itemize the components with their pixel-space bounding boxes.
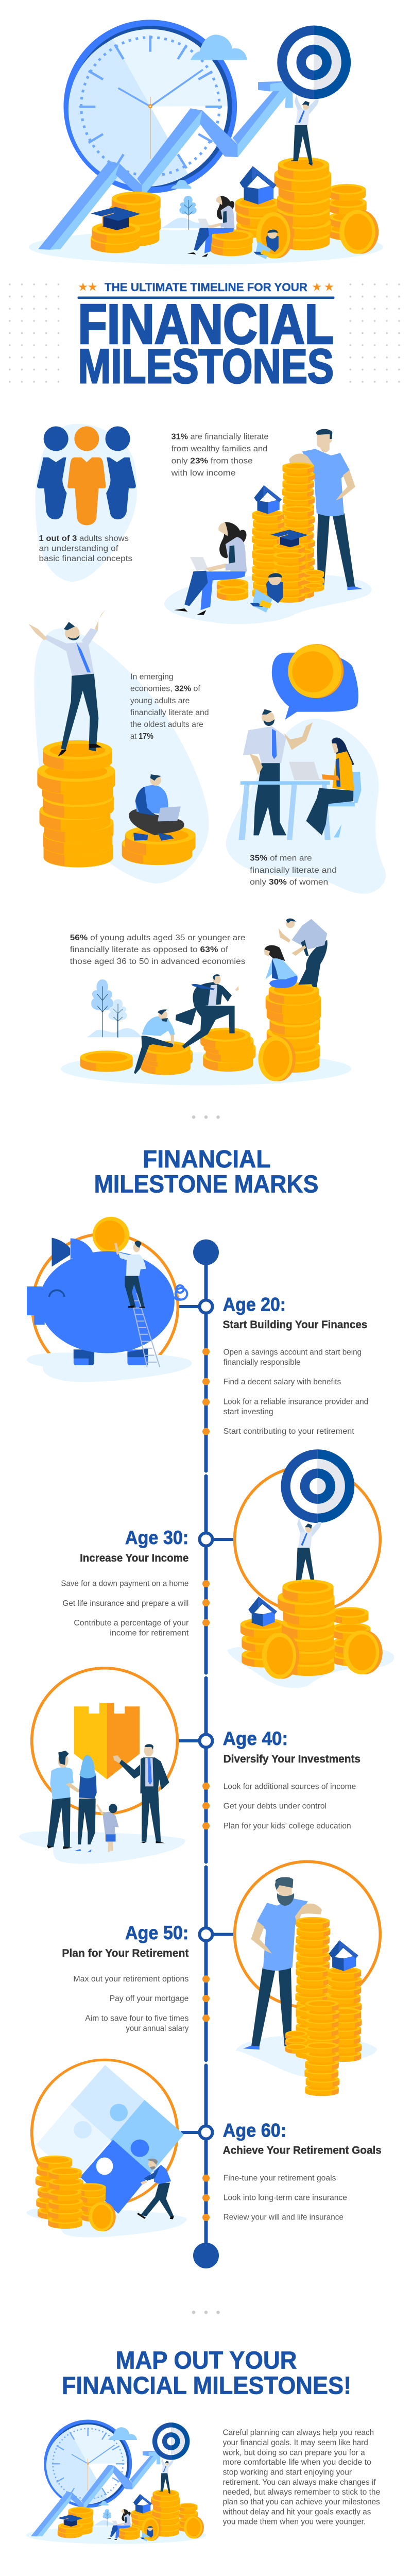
text: economies stat: In emerging — [130, 672, 174, 681]
text: age 30: income for retirement — [110, 1629, 189, 1637]
text: age 40: Get your debts under control — [224, 1802, 327, 1811]
heading: map out — [62, 2347, 351, 2399]
advisor — [113, 1744, 169, 1843]
text: income stat: with low income — [170, 469, 236, 478]
text: age 60: Review your will and life insurance — [224, 2213, 344, 2222]
section: financial literacy facts — [28, 424, 386, 894]
closing paragraph: work, but doing so can prepare you for a — [222, 2448, 365, 2457]
title: MILESTONES — [78, 339, 334, 393]
text: economies stat: the oldest adults are — [130, 720, 203, 729]
panel: age 20 and 30 — [27, 1217, 394, 1688]
closing paragraph: stop working and start enjoying your — [223, 2468, 352, 2477]
text: age 50 — [62, 1922, 189, 2033]
text: young adults stat — [70, 934, 246, 966]
text: income stat: from wealthy families and — [171, 445, 267, 453]
text: adults stat: 1 out of 3 adults shows — [39, 534, 129, 543]
title: FINANCIAL — [78, 293, 334, 355]
icon: house — [254, 485, 282, 514]
text: age 30: Age 30: — [125, 1527, 188, 1548]
title — [78, 293, 334, 393]
text: age 60 — [223, 2120, 382, 2222]
target — [281, 1449, 354, 1523]
text: age 40: Age 40: — [223, 1728, 288, 1749]
upright coins — [262, 1630, 383, 1679]
rule — [78, 297, 334, 299]
speech bubble — [272, 653, 358, 720]
text: age 50: Aim to save four to five times — [85, 2014, 189, 2023]
coin — [93, 1217, 129, 1253]
coins under seated man — [122, 825, 196, 865]
section: young adults — [61, 919, 351, 1198]
big man — [243, 1877, 322, 2049]
coins — [80, 982, 321, 1081]
hills and trees — [87, 979, 142, 1038]
text: young adults stat: 56% of young adults aged 35 or younger are — [70, 934, 246, 942]
connectors — [179, 1307, 233, 2132]
retirement man illustration — [235, 1861, 380, 2096]
text: economies stat: financially literate and — [130, 708, 209, 717]
target illustration — [227, 1449, 394, 1688]
text: income stat: only 23% from those — [171, 456, 253, 465]
text: gender stat: 35% of men are — [250, 854, 312, 862]
text: age 20: Start contributing to your retirement — [224, 1427, 355, 1436]
text: gender stat: only 30% of women — [250, 878, 328, 887]
man on ladder — [114, 1241, 146, 1308]
ground — [61, 1052, 351, 1086]
text: age 60: Fine-tune your retirement goals — [224, 2174, 336, 2183]
age nodes — [200, 1300, 212, 2139]
woman kneeling — [264, 945, 298, 988]
ring — [235, 1861, 380, 2007]
text: age 50: your annual salary — [126, 2024, 189, 2033]
timeline — [179, 1240, 233, 2268]
subtitle: ★ ★ — [78, 280, 98, 293]
text: income stat — [170, 433, 268, 478]
text: age 40: Plan for your kids’ college education — [224, 1822, 351, 1831]
ring — [32, 1234, 178, 1380]
running man — [176, 974, 239, 1048]
text: age 30: Get life insurance and prepare a will — [62, 1599, 188, 1608]
text: age 50: Plan for Your Retirement — [62, 1947, 188, 1959]
coin towers — [217, 463, 324, 603]
child — [96, 1804, 119, 1852]
text: age 60: Age 60: — [223, 2120, 286, 2141]
hero illustration — [29, 20, 383, 264]
ground — [227, 1647, 394, 1688]
notches — [204, 1471, 208, 2065]
house — [248, 1597, 277, 1626]
house — [329, 1940, 358, 1971]
blob — [34, 628, 209, 884]
text: gender stat — [250, 854, 337, 887]
heading: map out: FINANCIAL MILESTONES! — [62, 2372, 351, 2399]
text: adults stat — [39, 534, 133, 563]
blob — [226, 719, 386, 894]
panel: closing — [26, 2419, 380, 2544]
tail — [174, 1285, 187, 1300]
puzzle illustration — [26, 2060, 186, 2238]
laptop — [289, 762, 324, 780]
text: age 50: Max out your retirement options — [73, 1975, 189, 1984]
text: economies stat: economies, 32% of — [130, 684, 201, 693]
father — [47, 1751, 92, 1849]
closing paragraph: your financial goals. It may seem like hard — [223, 2438, 368, 2447]
crouching man — [134, 1009, 175, 1074]
family illustration — [19, 1668, 185, 1863]
desk — [238, 781, 331, 840]
panel: gender — [226, 644, 386, 894]
closing paragraph: Careful planning can always help you reach — [223, 2429, 374, 2437]
heading: financial milestone marks — [94, 1146, 318, 1198]
start and end caps — [193, 1240, 219, 2268]
subtitle: ★ ★ — [312, 280, 334, 293]
ring — [235, 1466, 380, 1612]
text: age 30 — [61, 1527, 189, 1637]
big man — [289, 429, 363, 590]
icon: coin — [288, 644, 344, 698]
heading: financial milestone marks: FINANCIAL — [143, 1146, 271, 1173]
dot patterns — [4, 278, 408, 388]
woman at desk — [306, 738, 362, 838]
text: income stat: 31% are financially literate — [171, 433, 268, 442]
icon: three people — [37, 427, 136, 525]
text: age 20: Find a decent salary with benefits — [224, 1378, 341, 1386]
panel: emerging economies — [28, 609, 209, 884]
subtitle: THE ULTIMATE TIMELINE FOR YOUR — [105, 281, 307, 294]
spine — [204, 1252, 208, 2256]
text: age 30: Save for a down payment on a home — [61, 1580, 188, 1588]
text: economies stat: at 17% — [130, 732, 153, 741]
closing paragraph: you made them when you were younger. — [223, 2517, 366, 2526]
text: age 40: Look for additional sources of income — [224, 1782, 356, 1791]
text: age 40 — [223, 1728, 360, 1831]
panel: age 60 and closing — [26, 2060, 382, 2399]
seated man — [129, 774, 184, 841]
heading: financial milestone marks: MILESTONE MARKS — [94, 1171, 318, 1198]
text: age 20: financially responsible — [224, 1358, 301, 1367]
text: age 60: Look into long-term care insurance — [224, 2193, 347, 2202]
man cheering — [28, 609, 106, 756]
text: age 20: Start Building Your Finances — [223, 1318, 367, 1331]
bullets — [202, 1348, 210, 2221]
man presenting — [243, 709, 313, 835]
section: hero and title — [4, 20, 408, 393]
coins — [241, 1580, 370, 1676]
text: adults stat: basic financial concepts — [39, 554, 133, 563]
ground — [236, 2035, 377, 2077]
text: adults stat: an understanding of — [39, 544, 118, 553]
panel: family income — [164, 429, 371, 624]
coins — [36, 2156, 116, 2231]
puzzle pieces — [36, 2065, 184, 2214]
icon: cap — [270, 530, 308, 547]
closing paragraph: more comfortable life when you decide to — [223, 2458, 371, 2467]
ring — [32, 2060, 177, 2205]
text: age 30: Contribute a percentage of your — [74, 1619, 188, 1628]
text: economies stat: young adults are — [130, 697, 190, 705]
coin tower — [37, 740, 115, 868]
closing paragraph: without delay and hit your goals exactly as — [222, 2508, 371, 2517]
piggy bank illustration — [27, 1217, 192, 1382]
text: age 60: Achieve Your Retirement Goals — [223, 2144, 382, 2157]
text: age 20: start investing — [224, 1408, 273, 1416]
ground — [26, 2208, 186, 2238]
closing paragraph: retirement. You can always make changes if — [223, 2478, 376, 2487]
text: age 20 — [223, 1294, 368, 1436]
woman — [174, 522, 247, 615]
text: age 30: Increase Your Income — [80, 1552, 188, 1564]
panel: 1 out of 3 adults — [35, 424, 137, 582]
text: age 20: Age 20: — [223, 1294, 286, 1315]
panel: age 40 and 50 — [19, 1668, 380, 2096]
small hero illustration — [26, 2419, 207, 2544]
shield — [74, 1703, 140, 1780]
mother — [74, 1755, 97, 1852]
man pushing — [137, 2159, 174, 2219]
text: age 20: Open a savings account and start being — [224, 1348, 362, 1357]
text: age 20: Look for a reliable insurance provider and — [224, 1398, 368, 1406]
blob — [35, 424, 137, 582]
coin towers — [285, 1917, 362, 2096]
text: young adults stat: those aged 36 to 50 in advanced economies — [70, 957, 246, 966]
pig — [27, 1238, 175, 1365]
text: gender stat: financially literate and — [250, 866, 337, 875]
man bending — [279, 919, 328, 987]
blob — [164, 574, 371, 624]
text: age 40: Diversify Your Investments — [224, 1753, 360, 1765]
ladder — [130, 1293, 160, 1367]
text: age 50: Pay off your mortgage — [110, 1994, 188, 2003]
closing paragraph: needed, but always remember to stick to the — [223, 2488, 380, 2497]
separator dots — [192, 2311, 220, 2314]
heading: map out: MAP OUT YOUR — [115, 2347, 297, 2374]
man — [294, 1518, 321, 1588]
text: age 50: Age 50: — [125, 1922, 188, 1943]
text: young adults stat: financially literate as opposed to 63% of — [70, 945, 229, 954]
text: economies stat — [130, 672, 209, 741]
ground — [19, 1832, 185, 1863]
closing paragraph: plan so that you can achieve your milestones — [223, 2498, 380, 2506]
ring — [32, 1668, 177, 1814]
closing paragraph — [222, 2429, 380, 2526]
child — [250, 573, 283, 613]
ground — [27, 1353, 192, 1382]
separator dots — [192, 1115, 220, 1119]
